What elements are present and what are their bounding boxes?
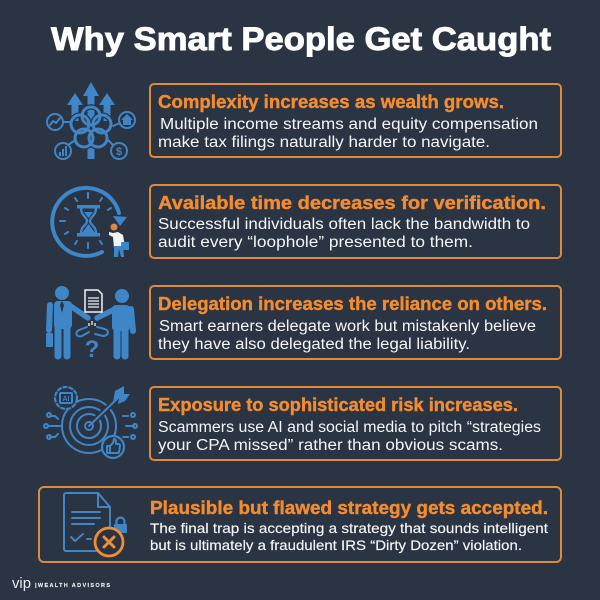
body text: The final trap is accepting a strategy that sounds intelligent	[150, 520, 548, 536]
icon: knot with arrows: $	[116, 146, 122, 158]
panel: risk	[44, 386, 561, 460]
panel: complexity	[47, 82, 561, 159]
body text: Smart earners delegate work but mistakenly believe	[159, 318, 536, 335]
icon: document with lock and X	[64, 493, 127, 556]
body text: Scammers use AI and social media to pitch “strategies	[158, 419, 541, 436]
panel: delegation	[46, 286, 561, 363]
body text: Multiple income streams and equity compensation	[160, 116, 538, 133]
icon: target, AI brain and thumbs up: AI	[62, 396, 70, 403]
title: Why Smart People Get Caught	[51, 21, 551, 57]
card: complexity	[150, 84, 561, 157]
body text	[158, 116, 538, 151]
body text: your CPA missed” rather than obvious scams.	[158, 437, 503, 454]
body text: but is ultimately a fraudulent IRS “Dirty Dozen” violation.	[150, 537, 522, 553]
heading: Plausible but flawed strategy gets accepted.	[150, 497, 548, 518]
body text	[158, 419, 541, 454]
heading: Available time decreases for verification.	[158, 192, 546, 213]
footer logo: |WEALTH ADVISORS	[35, 583, 110, 589]
panel: time	[52, 185, 561, 258]
heading: Delegation increases the reliance on others.	[158, 293, 547, 314]
footer logo	[12, 575, 110, 592]
heading: Complexity increases as wealth grows.	[158, 91, 504, 112]
card: time	[150, 185, 561, 258]
body text: Successful individuals often lack the bandwidth to	[158, 216, 530, 233]
card: risk	[150, 387, 561, 460]
body text	[158, 318, 536, 353]
panel: flawed strategy highlighted	[39, 487, 561, 562]
body text: make tax filings naturally harder to navigate.	[158, 134, 490, 151]
body text	[150, 520, 548, 553]
icon: two people, document and broken chain: ?	[85, 336, 99, 363]
body text: they have also delegated the legal liability.	[158, 336, 470, 353]
icon: target, AI brain and thumbs up	[44, 386, 137, 458]
icon: clock, hourglass and businessman	[52, 188, 129, 257]
icon: knot with arrows	[47, 82, 135, 159]
heading: Exposure to sophisticated risk increases.	[158, 394, 518, 415]
icon: two people, document and broken chain	[46, 286, 133, 363]
body text	[158, 216, 530, 251]
footer logo: vip	[12, 575, 31, 592]
body text: audit every “loophole” presented to them.	[158, 234, 473, 251]
card: delegation	[150, 286, 561, 359]
